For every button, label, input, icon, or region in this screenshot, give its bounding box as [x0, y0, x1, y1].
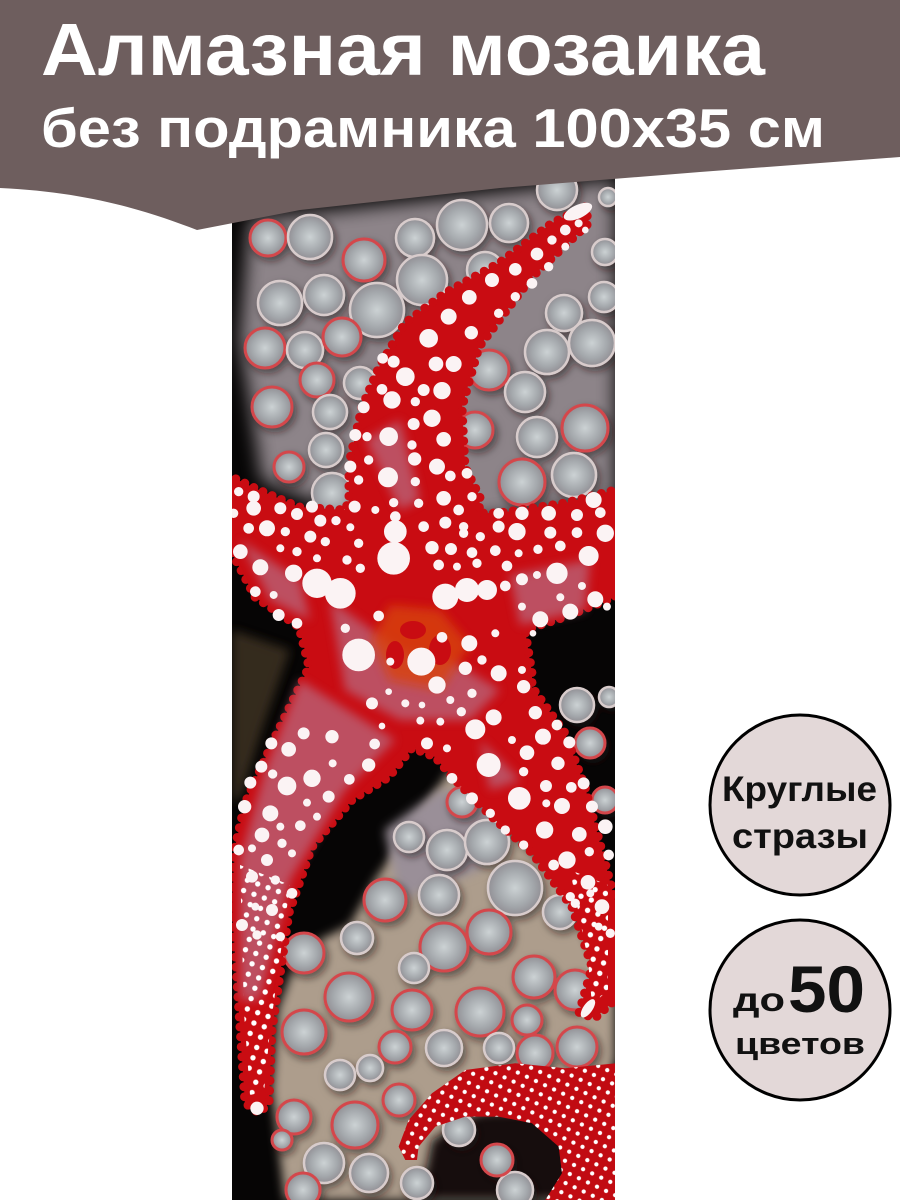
small red starfish, lower right	[399, 1063, 615, 1200]
header banner	[0, 0, 900, 230]
large red starfish	[230, 199, 615, 1114]
upper anemone discs	[245, 170, 619, 513]
subtitle: без подрамника 100х35 см	[41, 97, 825, 159]
badge: round rhinestones: Круглые	[722, 770, 877, 809]
lower beige reef	[272, 770, 615, 1200]
pink mottled patches	[240, 420, 590, 1000]
title: Алмазная мозаика	[41, 8, 766, 91]
badge: up to 50 colours: 50	[788, 952, 865, 1026]
badge: round rhinestones: стразы	[732, 817, 868, 856]
white spines, lower half	[235, 678, 614, 1114]
badge: up to 50 colours: до	[733, 981, 785, 1018]
badge: up to 50 colours	[710, 920, 890, 1100]
badge: up to 50 colours: цветов	[735, 1026, 865, 1061]
brown left shadow	[232, 630, 290, 800]
central orange plates	[372, 605, 470, 690]
upper background of anemones	[240, 180, 615, 520]
dark arch under small starfish	[419, 1116, 562, 1200]
panel: starfish artwork	[230, 170, 619, 1200]
lower anemone discs	[272, 687, 619, 1200]
dense spines on lower arm tips	[240, 865, 608, 1095]
badge: round rhinestones	[710, 715, 890, 895]
lilac reef highlight	[385, 790, 500, 900]
white spines, upper half	[230, 199, 613, 680]
